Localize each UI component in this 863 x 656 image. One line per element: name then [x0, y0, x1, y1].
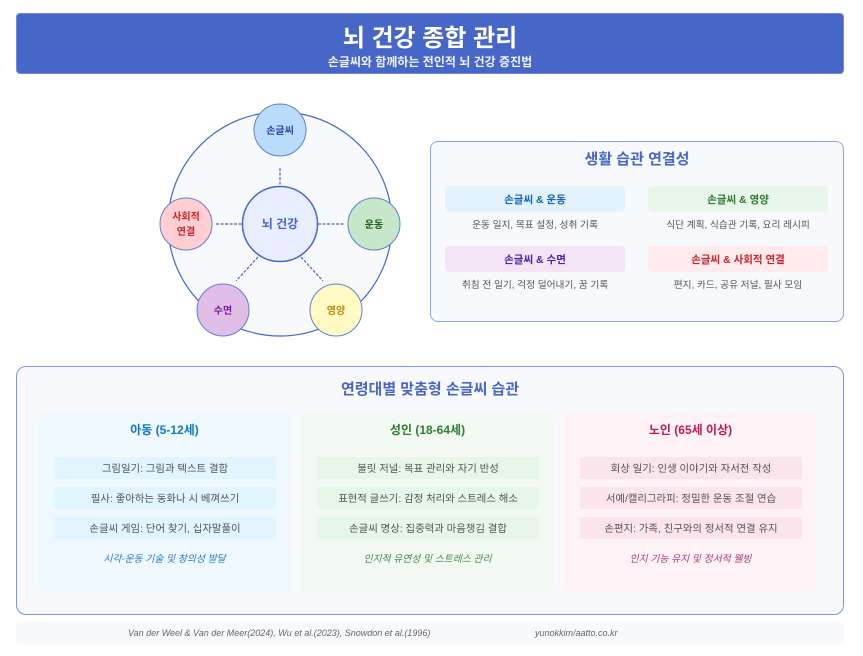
item — [54, 457, 276, 479]
column heading: 성인 (18-64세) — [390, 423, 465, 437]
connector: lower right — [301, 257, 323, 281]
item: 손글씨 명상: 집중력과 마음챙김 결합 — [349, 524, 507, 535]
item — [317, 517, 539, 539]
item — [580, 487, 802, 509]
card: handwriting and exercise — [445, 186, 625, 231]
item — [54, 487, 276, 509]
center node — [242, 186, 318, 262]
item — [580, 457, 802, 479]
brain health circular diagram — [160, 104, 400, 337]
column heading: 노인 (65세 이상) — [649, 423, 732, 437]
node: social connection: 연결 — [177, 225, 195, 238]
chip: 손글씨 & 사회적 연결 — [691, 254, 785, 266]
chip — [648, 186, 828, 212]
item: 손편지: 가족, 친구와의 정서적 연결 유지 — [604, 524, 778, 535]
chip — [445, 246, 625, 272]
item: 그림일기: 그림과 텍스트 결합 — [102, 464, 228, 475]
item — [580, 517, 802, 539]
node: social connection: 사회적 — [172, 210, 200, 223]
item: 손글씨 게임: 단어 찾기, 십자말풀이 — [89, 524, 241, 535]
column: seniors — [565, 412, 816, 592]
outer ring — [168, 112, 392, 336]
references: Van der Weel & Van der Meer(2024), Wu et al.(2023), Snowdon et al.(1996) — [128, 628, 430, 638]
author credit: yunokkim/aatto.co.kr — [535, 628, 618, 638]
item: 서예/캘리그라피: 정밀한 운동 조절 연습 — [606, 494, 776, 505]
column heading: 아동 (5-12세) — [130, 423, 199, 437]
column: adults — [302, 412, 553, 592]
title: 뇌 건강 종합 관리 — [343, 25, 517, 52]
connector: right — [318, 223, 344, 225]
node: nutrition: 영양 — [327, 304, 345, 317]
node: social connection — [160, 198, 212, 250]
description: 취침 전 일기, 걱정 덜어내기, 꿈 기록 — [462, 280, 608, 291]
center node: 뇌 건강 — [262, 217, 298, 231]
description: 운동 일지, 목표 설정, 성취 기록 — [472, 220, 598, 231]
node: handwriting — [254, 104, 306, 156]
chip: 손글씨 & 수면 — [504, 254, 566, 266]
header banner — [16, 13, 844, 74]
card: handwriting and social connection — [648, 246, 828, 291]
card: handwriting and sleep — [445, 246, 625, 291]
node: sleep — [197, 284, 249, 336]
card: handwriting and nutrition — [648, 186, 828, 231]
chip — [648, 246, 828, 272]
chip: 손글씨 & 영양 — [707, 194, 769, 206]
benefit note: 인지 기능 유지 및 정서적 웰빙 — [630, 554, 751, 565]
item: 불릿 저널: 목표 관리와 자기 반성 — [357, 464, 499, 475]
item — [317, 487, 539, 509]
item: 필사: 좋아하는 동화나 시 베껴쓰기 — [91, 494, 239, 505]
panel: age-specific handwriting habits — [16, 366, 844, 615]
benefit note: 인지적 유연성 및 스트레스 관리 — [363, 554, 492, 565]
chip — [445, 186, 625, 212]
item: 회상 일기: 인생 이야기와 자서전 작성 — [611, 464, 771, 475]
connector: left — [216, 223, 242, 225]
chip: 손글씨 & 운동 — [504, 194, 566, 206]
node: handwriting: 손글씨 — [266, 125, 294, 137]
description: 식단 계획, 식습관 기록, 요리 레시피 — [666, 220, 810, 231]
node: nutrition — [310, 284, 362, 336]
item: 표현적 글쓰기: 감정 처리와 스트레스 해소 — [338, 494, 518, 505]
node: exercise — [348, 198, 400, 250]
panel: lifestyle habit connections — [430, 141, 844, 322]
item — [317, 457, 539, 479]
subtitle: 손글씨와 함께하는 전인적 뇌 건강 증진법 — [328, 55, 532, 69]
footer bar — [16, 622, 844, 645]
item — [54, 517, 276, 539]
panel heading: 생활 습관 연결성 — [585, 151, 689, 168]
connector: top — [279, 168, 281, 186]
node: exercise: 운동 — [365, 219, 383, 231]
connector: lower left — [236, 257, 258, 281]
node: sleep: 수면 — [214, 305, 232, 317]
benefit note: 시각-운동 기술 및 창의성 발달 — [103, 554, 226, 565]
age section heading: 연령대별 맞춤형 손글씨 습관 — [341, 381, 519, 398]
column: children — [39, 412, 290, 592]
description: 편지, 카드, 공유 저널, 필사 모임 — [674, 280, 802, 291]
